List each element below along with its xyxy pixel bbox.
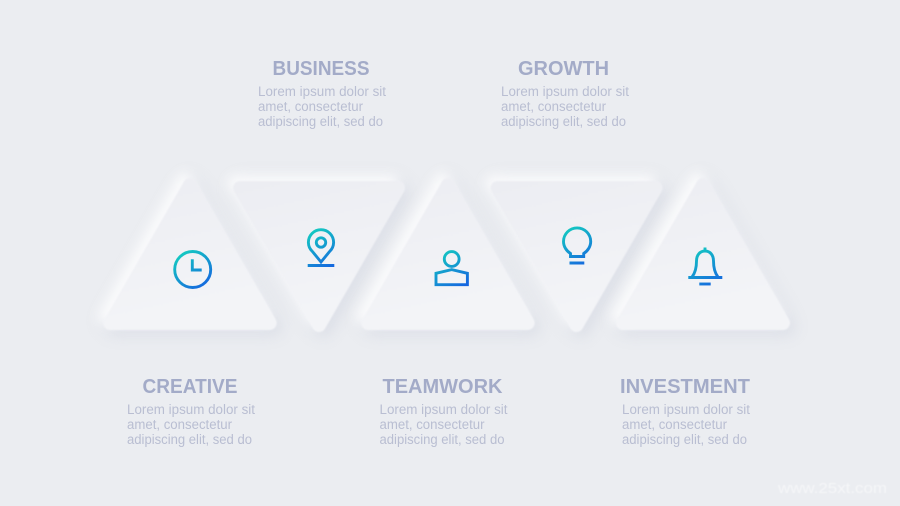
description: business: amet, consectetur <box>258 99 363 114</box>
heading: growth: GROWTH <box>518 57 609 80</box>
description: investment: Lorem ipsum dolor sit <box>622 402 750 417</box>
icon: light bulb <box>564 228 591 263</box>
heading: business: BUSINESS <box>272 57 370 80</box>
description: teamwork: Lorem ipsum dolor sit <box>380 402 508 417</box>
description: investment: amet, consectetur <box>622 417 727 432</box>
text block: business <box>258 57 386 129</box>
triangle card: creative <box>110 185 270 323</box>
description: creative: adipiscing elit, sed do <box>127 432 252 447</box>
description: business: Lorem ipsum dolor sit <box>258 84 386 99</box>
heading: investment: INVESTMENT <box>620 375 750 398</box>
description: creative: amet, consectetur <box>127 417 232 432</box>
description: growth: Lorem ipsum dolor sit <box>501 84 629 99</box>
icon: bell <box>688 248 722 284</box>
description: growth: amet, consectetur <box>501 99 606 114</box>
triangle card: investment <box>623 185 783 323</box>
description: teamwork: adipiscing elit, sed do <box>380 432 504 447</box>
text block: growth <box>501 57 629 129</box>
description: creative: Lorem ipsum dolor sit <box>127 402 255 417</box>
triangle card: business <box>240 188 398 325</box>
triangle card: growth <box>498 188 656 325</box>
icon: clock <box>175 252 211 288</box>
heading: creative: CREATIVE <box>142 375 238 398</box>
watermark: www.25xt.com <box>777 480 887 497</box>
triangle card: teamwork <box>368 185 528 323</box>
description: teamwork: amet, consectetur <box>380 417 485 432</box>
heading: teamwork: TEAMWORK <box>382 375 503 398</box>
text block: creative <box>127 375 255 447</box>
description: investment: adipiscing elit, sed do <box>622 432 747 447</box>
description: business: adipiscing elit, sed do <box>258 114 383 129</box>
text block: teamwork <box>380 375 508 447</box>
description: growth: adipiscing elit, sed do <box>501 114 626 129</box>
text block: investment <box>620 375 750 447</box>
icon: location pin <box>308 230 334 266</box>
icon: person <box>436 252 467 285</box>
